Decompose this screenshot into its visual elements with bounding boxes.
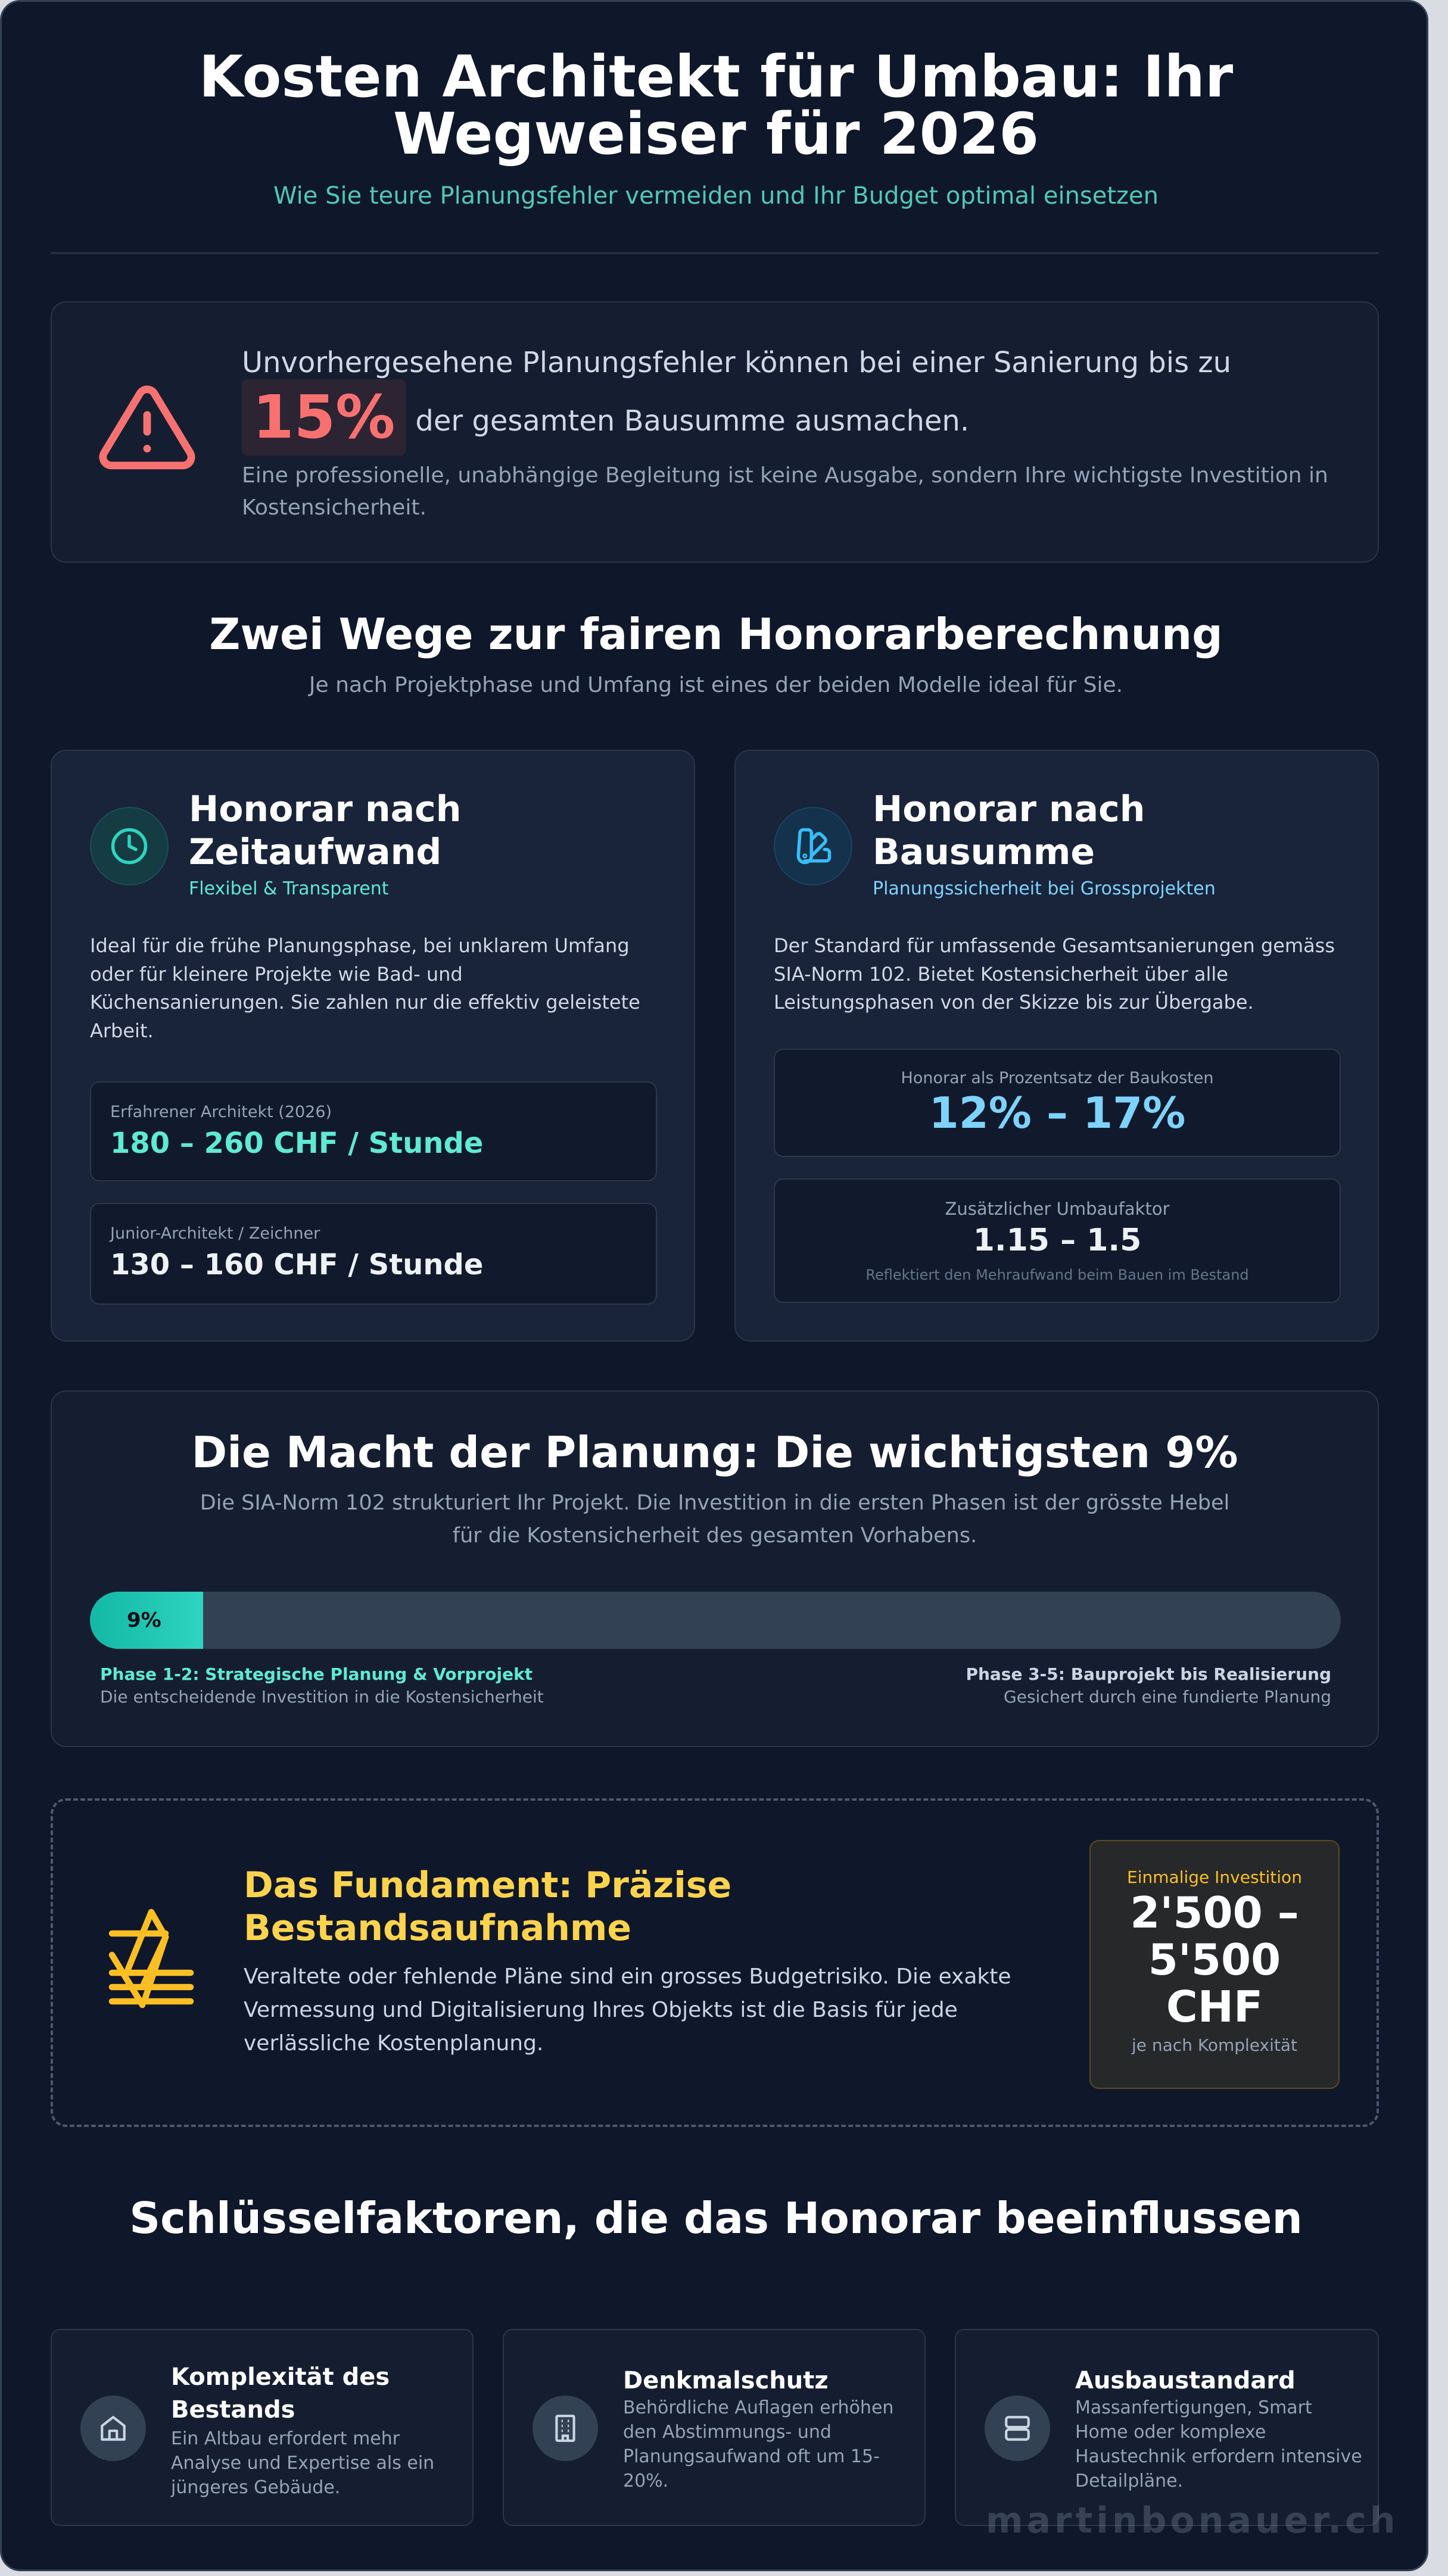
- icon: server: [985, 2396, 1050, 2461]
- card title: Honorar nach: [189, 788, 461, 830]
- factor card: Ausbaustandard: [955, 2329, 1379, 2526]
- panel: Zeitaufwand: [51, 750, 695, 1342]
- description: Die SIA-Norm 102 strukturiert Ihr Projekt. Die Investition in die ersten Phasen ist der grösste Hebel für die Kostensicherheit des gesamten Vorhabens.: [200, 1491, 1229, 1548]
- rate box: junior: 130 – 160 CHF / Stunde: [110, 1248, 483, 1281]
- card title: [873, 788, 1145, 873]
- factor card: Komplexität: [51, 2329, 474, 2526]
- percent box: [774, 1049, 1341, 1157]
- title: [199, 43, 1233, 167]
- factor card: Ausbaustandard: Massanfertigungen, Smart Home oder komplexe Haustechnik erfordern intensive Detailpläne.: [1075, 2397, 1362, 2491]
- panel: Bausumme: [734, 750, 1379, 1342]
- title: Wegweiser für 2026: [393, 101, 1039, 167]
- price box: CHF: [1166, 1982, 1263, 2032]
- price box: [1089, 1840, 1340, 2089]
- factor card: Komplexität: Komplexität des Bestands: [171, 2363, 390, 2424]
- label left: Phase 1-2: Strategische Planung & Vorprojekt: [100, 1664, 533, 1684]
- price box: je nach Komplexität: [1132, 2035, 1297, 2055]
- subtitle: Wie Sie teure Planungsfehler vermeiden und Ihr Budget optimal einsetzen: [273, 182, 1159, 210]
- label left: Die entscheidende Investition in die Kostensicherheit: [100, 1687, 544, 1707]
- factor box: 1.15 – 1.5: [973, 1222, 1141, 1258]
- warning text: der gesamten Bausumme ausmachen.: [415, 404, 969, 438]
- heading: schlüsselfaktoren: Schlüsselfaktoren, die das Honorar beeinflussen: [129, 2193, 1303, 2243]
- factor card: Komplexität: Ein Altbau erfordert mehr Analyse und Expertise als ein jüngeres Gebäude.: [171, 2428, 434, 2498]
- percent box: Honorar als Prozentsatz der Baukosten: [901, 1069, 1213, 1087]
- icon: survey: [108, 1909, 194, 2008]
- icon: house: [80, 2396, 146, 2461]
- warning text: 15%: [253, 382, 395, 452]
- subheading: Je nach Projektphase und Umfang ist eines der beiden Modelle ideal für Sie.: [309, 673, 1123, 697]
- heading: Die Macht der Planung: Die wichtigsten 9%: [192, 1427, 1238, 1477]
- card subtitle: Planungssicherheit bei Grossprojekten: [873, 878, 1216, 899]
- progress bar: [90, 1592, 1341, 1649]
- panel: planning: [51, 1390, 1379, 1747]
- label right: Gesichert durch eine fundierte Planung: [1004, 1687, 1331, 1707]
- factor card: Denkmalschutz: Denkmalschutz: [623, 2367, 829, 2394]
- factor box: Zusätzlicher Umbaufaktor: [945, 1199, 1170, 1219]
- price box: 5'500: [1148, 1935, 1281, 1985]
- rate box: junior: [90, 1203, 657, 1305]
- icon: clock: [90, 807, 169, 885]
- label right: Phase 3-5: Bauprojekt bis Realisierung: [966, 1664, 1331, 1684]
- title: Kosten Architekt für Umbau: Ihr: [199, 43, 1233, 110]
- icon: swatch: [774, 807, 852, 885]
- rate box: junior: Junior-Architekt / Zeichner: [110, 1224, 320, 1243]
- card subtitle: Flexibel & Transparent: [189, 878, 389, 899]
- rate box: senior: Erfahrener Architekt (2026): [110, 1103, 332, 1121]
- description: Der Standard für umfassende Gesamtsanierungen gemäss SIA-Norm 102. Bietet Kostensicherheit über alle Leistungsphasen von der Skizze bis zur Übergabe.: [774, 934, 1335, 1013]
- card title: [189, 788, 461, 873]
- title: Bestandsaufnahme: [244, 1907, 631, 1949]
- warning text: Eine professionelle, unabhängige Begleitung ist keine Ausgabe, sondern Ihre wichtigste Investition in Kostensicherheit.: [242, 463, 1328, 520]
- label left: [100, 1664, 544, 1707]
- icon: building: [533, 2396, 598, 2461]
- panel: fundament: [51, 1798, 1379, 2127]
- card title: Honorar nach: [873, 788, 1145, 830]
- title: Das Fundament: Präzise: [244, 1864, 731, 1906]
- card title: Zeitaufwand: [189, 831, 441, 873]
- warning text: Unvorhergesehene Planungsfehler können bei einer Sanierung bis zu: [242, 346, 1231, 379]
- description: Veraltete oder fehlende Pläne sind ein grosses Budgetrisiko. Die exakte Vermessung und Digitalisierung Ihres Objekts ist die Basis für jede verlässliche Kostenplanung.: [244, 1964, 1011, 2056]
- label right: [966, 1664, 1331, 1707]
- percent box: 12% – 17%: [929, 1088, 1185, 1138]
- rate box: senior: [90, 1081, 657, 1181]
- warning text: [242, 346, 1328, 520]
- factor box: [774, 1178, 1341, 1303]
- heading: zwei wege: Zwei Wege zur fairen Honorarberechnung: [209, 609, 1223, 659]
- factor card: Denkmalschutz: [503, 2329, 926, 2526]
- icon: warning triangle: [99, 386, 195, 469]
- price box: 2'500 –: [1130, 1888, 1299, 1938]
- description: Ideal für die frühe Planungsphase, bei unklarem Umfang oder für kleinere Projekte wie Bad- und Küchensanierungen. Sie zahlen nur die effektiv geleistete Arbeit.: [90, 934, 640, 1042]
- card title: Bausumme: [873, 831, 1095, 873]
- rate box: senior: 180 – 260 CHF / Stunde: [110, 1127, 483, 1160]
- progress bar: 9%: [127, 1608, 161, 1632]
- price box: Einmalige Investition: [1127, 1867, 1302, 1887]
- watermark: martinbonauer.ch: [986, 2500, 1399, 2541]
- factor box: Reflektiert den Mehraufwand beim Bauen im Bestand: [865, 1267, 1249, 1283]
- factor card: Denkmalschutz: Behördliche Auflagen erhöhen den Abstimmungs- und Planungsaufwand oft um 15-20%.: [623, 2397, 893, 2491]
- factor card: Ausbaustandard: Ausbaustandard: [1075, 2367, 1296, 2394]
- panel: warning: [51, 301, 1379, 563]
- title: [244, 1864, 731, 1949]
